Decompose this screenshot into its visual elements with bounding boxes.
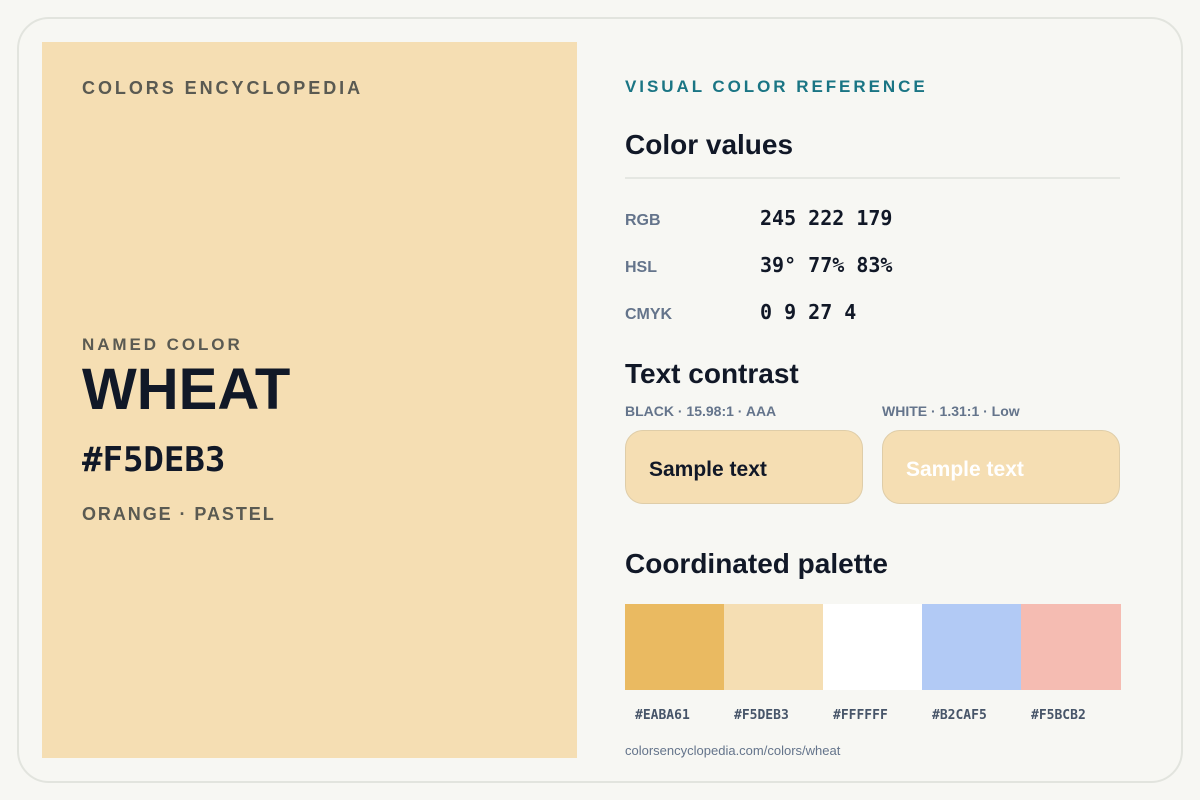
- swatch hex labels: #FFFFFF: [833, 708, 888, 723]
- RGB label: RGB: [625, 212, 661, 229]
- brand label: COLORS ENCYCLOPEDIA: [82, 78, 363, 98]
- source url: colorsencyclopedia.com/colors/wheat: [625, 743, 840, 758]
- HSL value: 39° 77% 83%: [760, 253, 892, 277]
- black contrast label: BLACK · 15.98:1 · AAA: [625, 403, 776, 419]
- palette swatches: [625, 604, 1121, 690]
- black sample box: [625, 430, 863, 504]
- swatch hex labels: #F5BCB2: [1031, 708, 1086, 723]
- hex code: #F5DEB3: [82, 440, 225, 480]
- swatch: F5DEB3: [724, 604, 823, 690]
- black sample box: Sample text: [649, 458, 767, 480]
- white contrast label: WHITE · 1.31:1 · Low: [882, 403, 1020, 419]
- swatch: F5BCB2: [1021, 604, 1121, 690]
- swatch hex labels: #EABA61: [635, 708, 690, 723]
- CMYK label: CMYK: [625, 306, 672, 323]
- swatch hex labels: [635, 708, 1086, 723]
- color name: WHEAT: [82, 357, 290, 422]
- swatch hex labels: #B2CAF5: [932, 708, 987, 723]
- heading: text contrast: Text contrast: [625, 358, 799, 389]
- color values table: [625, 206, 892, 324]
- eyebrow heading: VISUAL COLOR REFERENCE: [625, 77, 928, 96]
- heading: color values: Color values: [625, 129, 793, 160]
- swatch hex labels: #F5DEB3: [734, 708, 789, 723]
- divider: [625, 177, 1120, 179]
- white sample box: Sample text: [906, 458, 1024, 480]
- named color label: NAMED COLOR: [82, 335, 243, 354]
- CMYK value: 0 9 27 4: [760, 300, 856, 324]
- HSL label: HSL: [625, 259, 657, 276]
- swatch: EABA61: [625, 604, 724, 690]
- swatch: B2CAF5: [922, 604, 1021, 690]
- swatch: FFFFFF: [823, 604, 922, 690]
- RGB value: 245 222 179: [760, 206, 892, 230]
- heading: coordinated palette: Coordinated palette: [625, 548, 888, 579]
- color family: ORANGE · PASTEL: [82, 504, 276, 524]
- panel: wheat color hero: [42, 42, 577, 758]
- white sample box: [882, 430, 1120, 504]
